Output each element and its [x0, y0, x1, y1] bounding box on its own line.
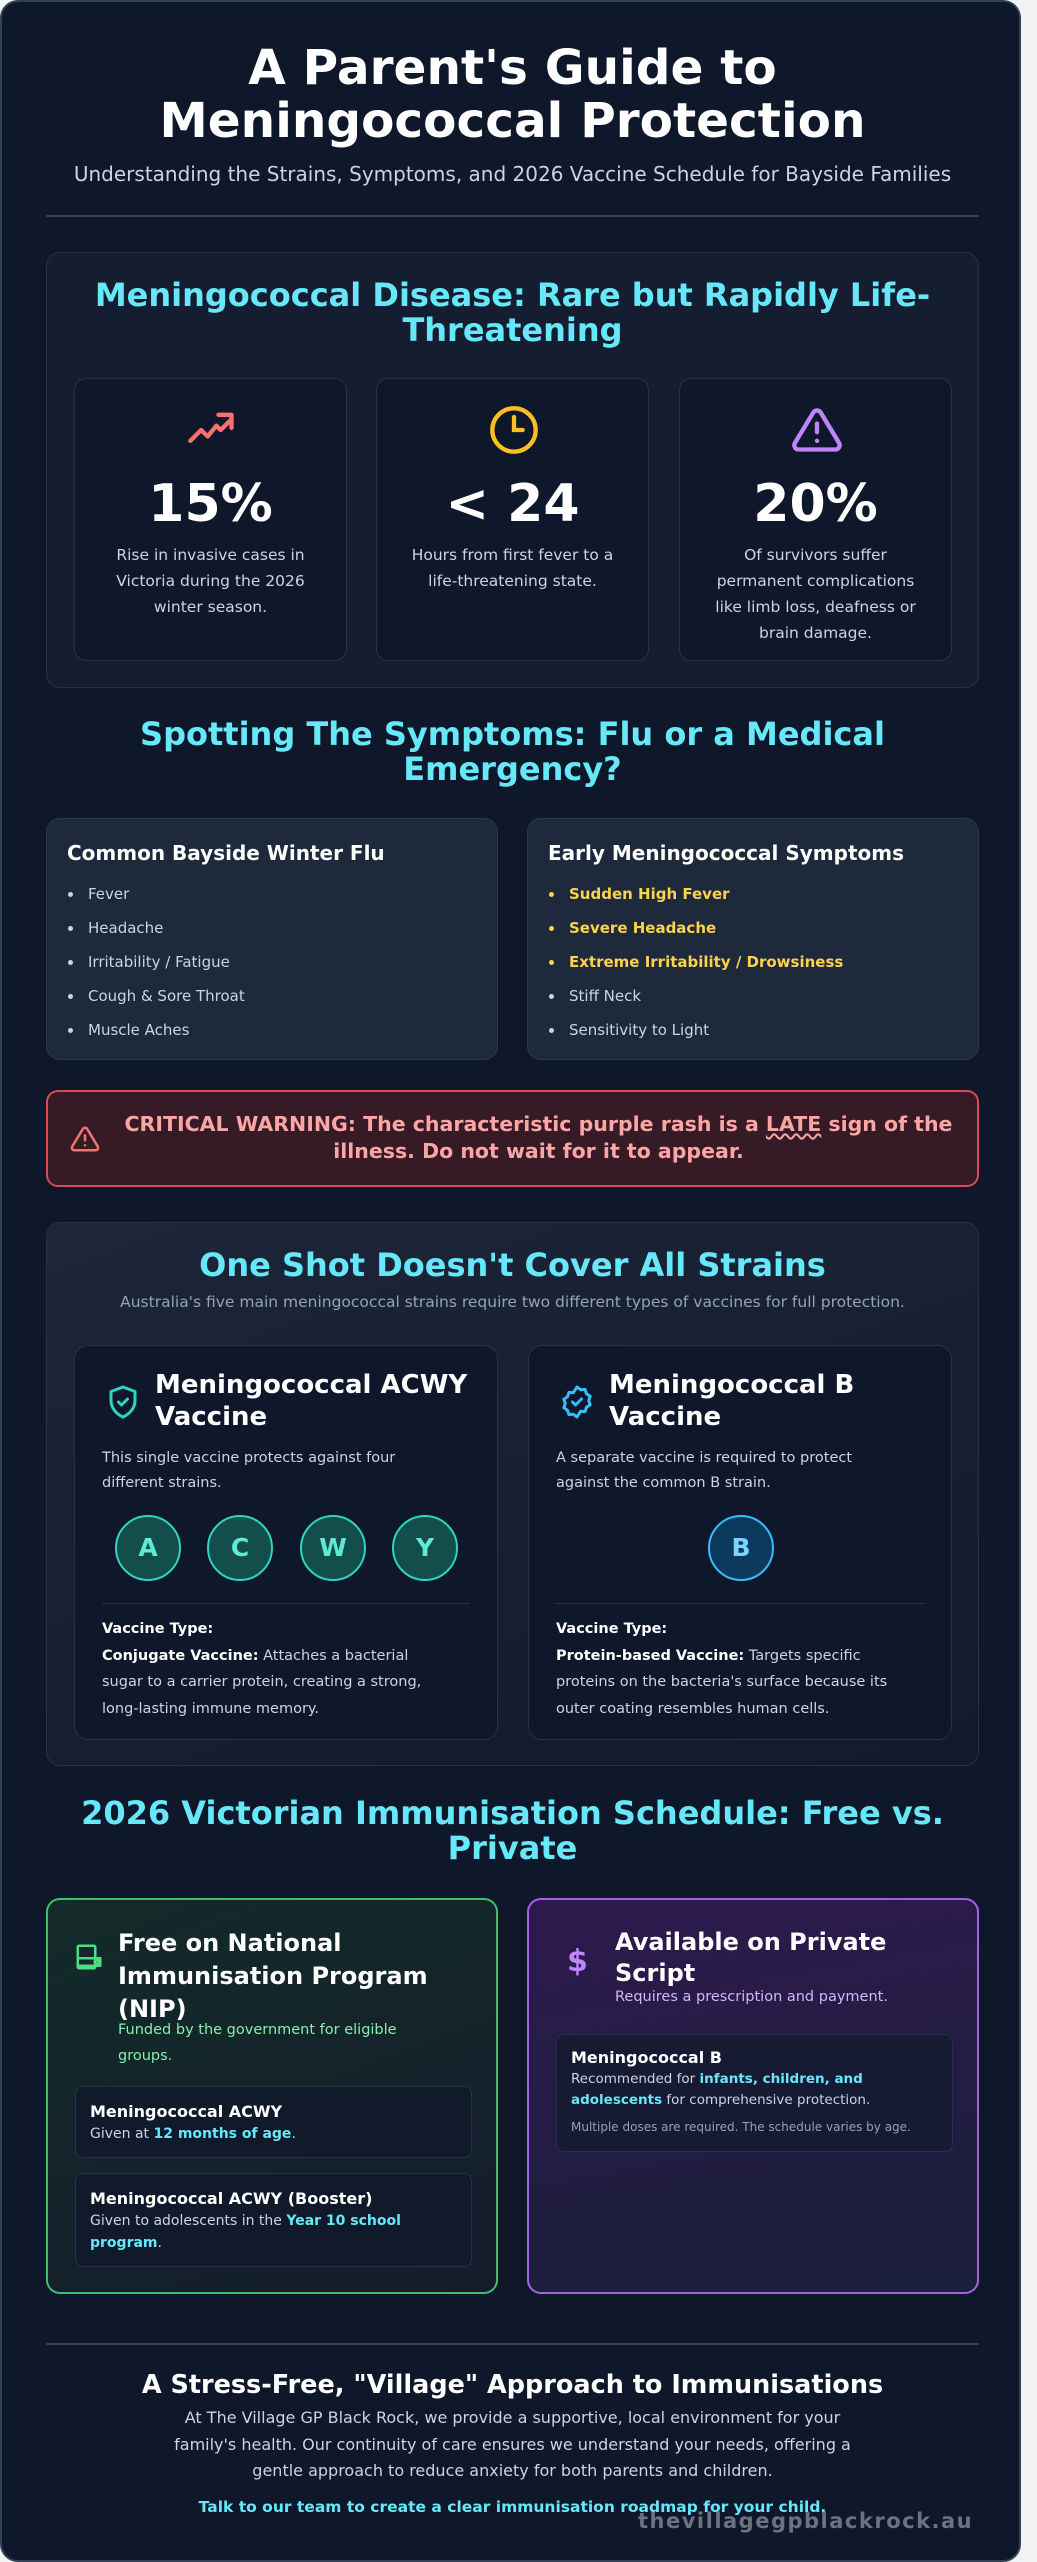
list: meningococcal symptoms: Sensitivity to Light: [569, 1021, 709, 1039]
stat: 20%: Of survivors suffer permanent complications like limb loss, deafness or brain damage.: [715, 546, 916, 642]
footer paragraph: At The Village GP Black Rock, we provide a supportive, local environment for your family's health. Our continuity of care ensures we understand your needs, offering a gentle approach to reduce anxiety for both parents and children.: [174, 2408, 851, 2480]
icon: shield check: [110, 1386, 136, 1418]
list: flu symptoms: Irritability / Fatigue: [88, 953, 230, 971]
item: ACWY booster: Given to adolescents in the Year 10 school program.: [90, 2213, 401, 2251]
heading: schedule: [81, 1794, 944, 1867]
item: ACWY booster: [75, 2173, 472, 2267]
heading: rare but rapidly life-threatening: Threatening: [402, 311, 623, 349]
callout: critical warning: [46, 1090, 979, 1187]
heading: spotting the symptoms: [140, 715, 885, 788]
list: meningococcal symptoms: Sudden High Fever: [569, 885, 730, 903]
card: B vaccine: [528, 1345, 952, 1740]
strain circles ACWY: [115, 1515, 458, 1581]
panel: disease stats: [46, 252, 979, 688]
card: ACWY vaccine: Meningococcal ACWY: [155, 1370, 467, 1400]
strain circle B: B: [731, 1533, 751, 1562]
heading: schedule: Private: [448, 1829, 577, 1867]
stat: < 24: Hours from first fever to a life-threatening state.: [412, 546, 613, 590]
panel: free NIP: Free on National Immunisation Program (NIP): [118, 1929, 428, 2023]
stat: < 24: < 24: [445, 474, 580, 534]
heading: rare but rapidly life-threatening: [95, 276, 930, 349]
icon: banknote: [76, 1944, 102, 1970]
icon: badge check: [562, 1385, 592, 1419]
callout: critical warning: CRITICAL WARNING: The characteristic purple rash is a LATE sign of the illness. Do not wait for it to appear.: [125, 1112, 952, 1163]
strain circles ACWY: C: [231, 1533, 249, 1562]
item: ACWY 12 months: [75, 2086, 472, 2158]
title: [160, 40, 865, 149]
icon: trending up: [188, 412, 234, 443]
subheading: Australia's five main meningococcal strains require two different types of vaccines for full protection.: [120, 1293, 905, 1311]
icon: warning: [70, 1126, 100, 1152]
item: ACWY 12 months: Given at 12 months of age.: [90, 2126, 296, 2142]
card: B vaccine: A separate vaccine is required to protect against the common B strain.: [556, 1450, 852, 1491]
panel: meningococcal symptoms: Early Meningococcal Symptoms: [548, 841, 904, 865]
list: flu symptoms: Muscle Aches: [88, 1021, 189, 1039]
heading: one shot: One Shot Doesn't Cover All Strains: [199, 1246, 826, 1284]
card: ACWY vaccine: This single vaccine protects against four different strains.: [102, 1450, 395, 1491]
heading: rare but rapidly life-threatening: Meningococcal Disease: Rare but Rapidly Life-: [95, 276, 930, 314]
panel: private script: Available on Private Script: [615, 1928, 886, 1987]
vaccine type text: Vaccine Type:: [102, 1621, 213, 1637]
stat: 20%: [679, 378, 952, 661]
panel: free NIP: Funded by the government for eligible groups.: [118, 2022, 397, 2064]
item: Men B: Meningococcal B: [571, 2048, 722, 2067]
title: A Parent's Guide to: [248, 40, 777, 96]
strain circle B: [708, 1515, 774, 1581]
icon: dollar: $: [567, 1944, 588, 1979]
watermark: thevillagegpblackrock.au: [638, 2509, 973, 2533]
icon: warning triangle: [792, 408, 842, 452]
stat: < 24: [376, 378, 649, 661]
item: Men B: Multiple doses are required. The schedule varies by age.: [571, 2120, 911, 2134]
item: Men B: Recommended for infants, children, and adolescents for comprehensive protection.: [571, 2071, 870, 2108]
strain circles ACWY: Y: [416, 1533, 434, 1562]
vaccine type text: Conjugate Vaccine: Attaches a bacterial sugar to a carrier protein, creating a strong, long-lasting immune memory.: [102, 1648, 421, 1716]
panel: common flu: [46, 818, 498, 1060]
item: ACWY booster: Meningococcal ACWY (Booster): [90, 2189, 372, 2208]
stat: 20%: 20%: [753, 474, 878, 534]
list: flu symptoms: Headache: [88, 919, 163, 937]
panel: free NIP: [46, 1898, 498, 2294]
card: ACWY vaccine: [74, 1345, 498, 1740]
panel: private script: [527, 1898, 979, 2294]
footer heading: A Stress-Free, "Village" Approach to Immunisations: [142, 2370, 883, 2400]
list: meningococcal symptoms: Severe Headache: [569, 919, 716, 937]
card: ACWY vaccine: Vaccine: [155, 1402, 267, 1432]
heading: spotting the symptoms: Spotting The Symptoms: Flu or a Medical: [140, 715, 885, 753]
subtitle: Understanding the Strains, Symptoms, and 2026 Vaccine Schedule for Bayside Families: [74, 162, 951, 186]
stat: 15%: 15%: [148, 474, 273, 534]
item: ACWY 12 months: Meningococcal ACWY: [90, 2102, 282, 2121]
heading: schedule: 2026 Victorian Immunisation Schedule: Free vs.: [81, 1794, 944, 1832]
title: Meningococcal Protection: [160, 93, 865, 149]
heading: spotting the symptoms: Emergency?: [403, 750, 622, 788]
strain circles ACWY: A: [138, 1533, 158, 1562]
list: flu symptoms: Fever: [88, 885, 129, 903]
call to action: Talk to our team to create a clear immunisation roadmap for your child.: [199, 2498, 826, 2516]
item: Men B: [556, 2034, 953, 2152]
list: flu symptoms: Cough & Sore Throat: [88, 987, 245, 1005]
icon: clock: [490, 406, 538, 454]
list: meningococcal symptoms: Extreme Irritability / Drowsiness: [569, 953, 843, 971]
vaccine type text: Vaccine Type:: [556, 1621, 667, 1637]
stat: 15%: [74, 378, 347, 661]
strain circles ACWY: W: [319, 1533, 347, 1562]
card: B vaccine: Vaccine: [609, 1402, 721, 1432]
panel: strains: [46, 1222, 979, 1766]
list: meningococcal symptoms: [549, 885, 843, 1039]
panel: meningococcal symptoms: [527, 818, 979, 1060]
list: meningococcal symptoms: Stiff Neck: [569, 987, 641, 1005]
panel: common flu: Common Bayside Winter Flu: [67, 841, 385, 865]
stat: 15%: Rise in invasive cases in Victoria during the 2026 winter season.: [116, 546, 305, 616]
panel: private script: Requires a prescription and payment.: [615, 1989, 888, 2005]
vaccine type text: Protein-based Vaccine: Targets specific proteins on the bacteria's surface because its outer coating resembles human cells.: [556, 1648, 887, 1716]
card: B vaccine: Meningococcal B: [609, 1370, 854, 1400]
list: flu symptoms: [68, 885, 245, 1039]
